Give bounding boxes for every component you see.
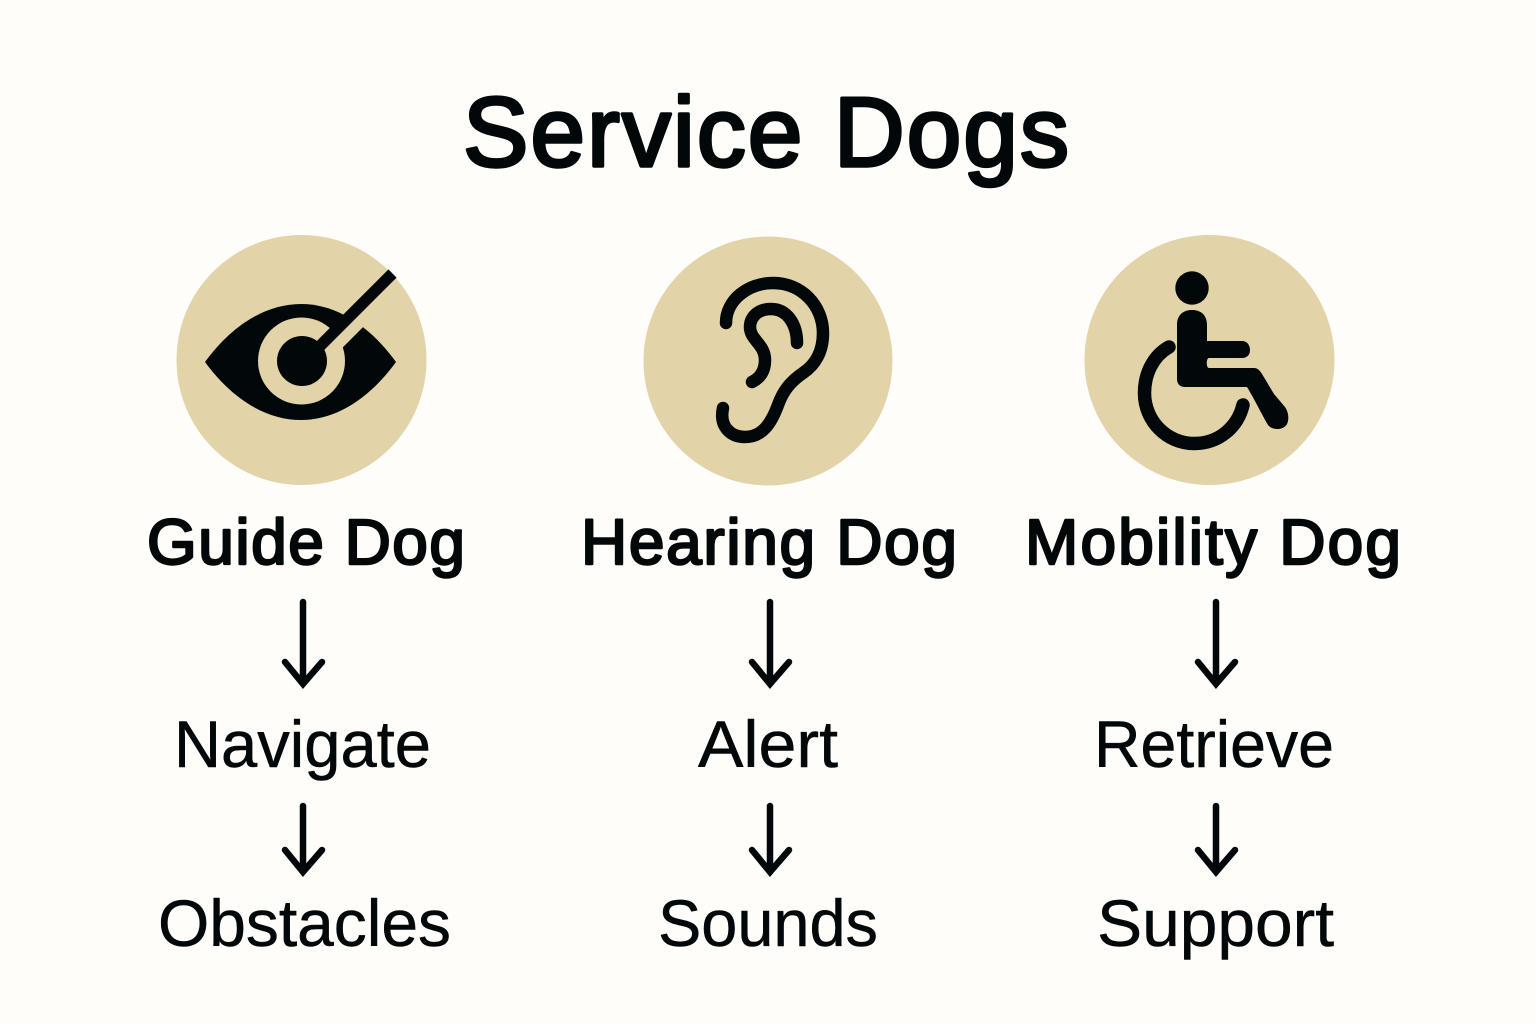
text: support: Support bbox=[1097, 886, 1334, 960]
icon: eye in circle bbox=[176, 235, 426, 485]
panel: hearing dog bbox=[581, 236, 957, 960]
heading: guide dog: Guide Dog bbox=[147, 506, 465, 578]
panel: guide dog bbox=[147, 235, 465, 960]
panel: mobility dog bbox=[1025, 235, 1401, 960]
text: sounds: Sounds bbox=[658, 886, 878, 960]
text: alert: Alert bbox=[698, 707, 838, 781]
arrow bbox=[752, 806, 789, 872]
heading: hearing dog: Hearing Dog bbox=[581, 506, 957, 578]
text: obstacles: Obstacles bbox=[158, 886, 451, 960]
text: retrieve: Retrieve bbox=[1094, 707, 1334, 781]
title: Service Dogs bbox=[463, 77, 1069, 187]
arrow bbox=[285, 806, 322, 872]
heading: mobility dog: Mobility Dog bbox=[1025, 506, 1401, 578]
arrow bbox=[1198, 602, 1235, 684]
arrow bbox=[285, 602, 322, 684]
icon: wheelchair in circle bbox=[1084, 235, 1334, 485]
arrow bbox=[1198, 806, 1235, 872]
icon: ear in circle bbox=[644, 236, 892, 486]
text: navigate: Navigate bbox=[174, 707, 431, 781]
arrow bbox=[752, 602, 789, 684]
